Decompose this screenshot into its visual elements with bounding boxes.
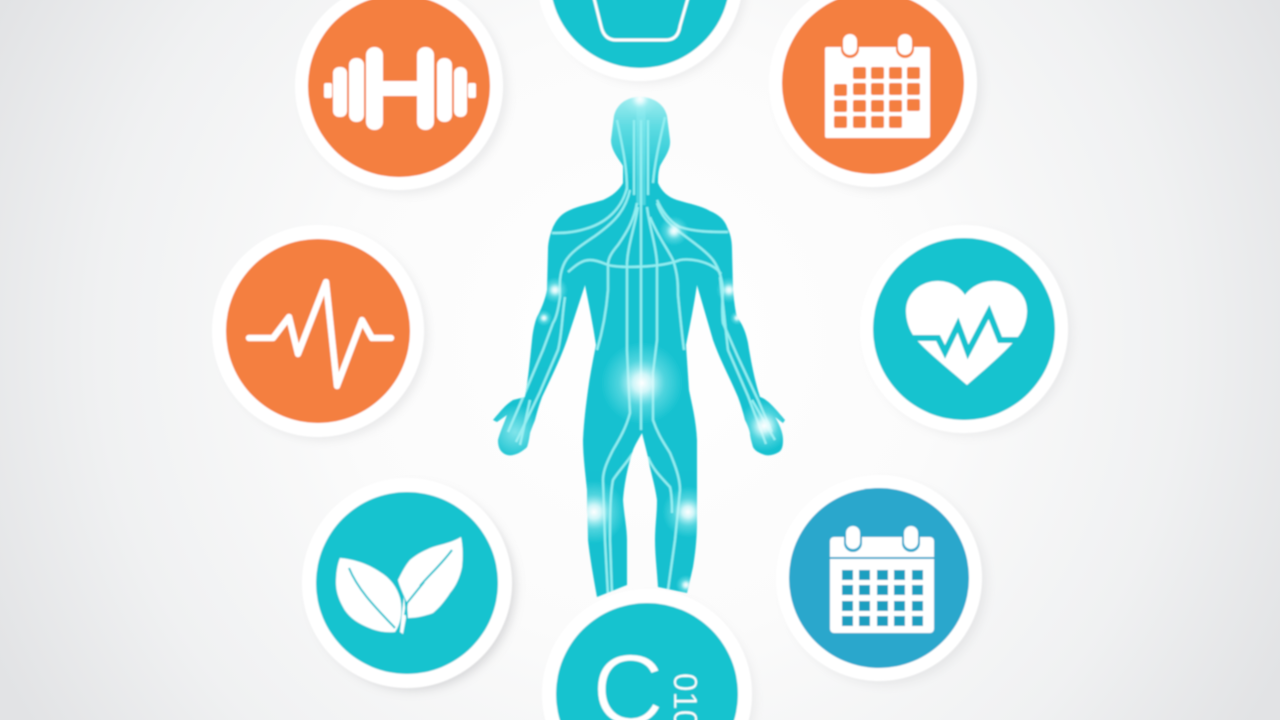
icon: heart with pulse circle (teal) [860,225,1071,435]
icon: calendar circle (orange) [769,0,981,190]
icon: pulse line circle (orange) [212,225,427,439]
nerve lines [508,100,775,595]
icon: C10 circle (bottom centre) [542,589,754,720]
glow points [487,81,790,595]
icon: dumbbell circle (orange) [295,0,507,193]
body silhouette [493,97,785,597]
icon: drinking glass circle (top centre) [537,0,745,82]
human body figure with nerve lines [487,81,790,597]
icon: calendar circle (blue) [776,475,986,684]
icon: leaves circle (teal) [302,478,515,690]
